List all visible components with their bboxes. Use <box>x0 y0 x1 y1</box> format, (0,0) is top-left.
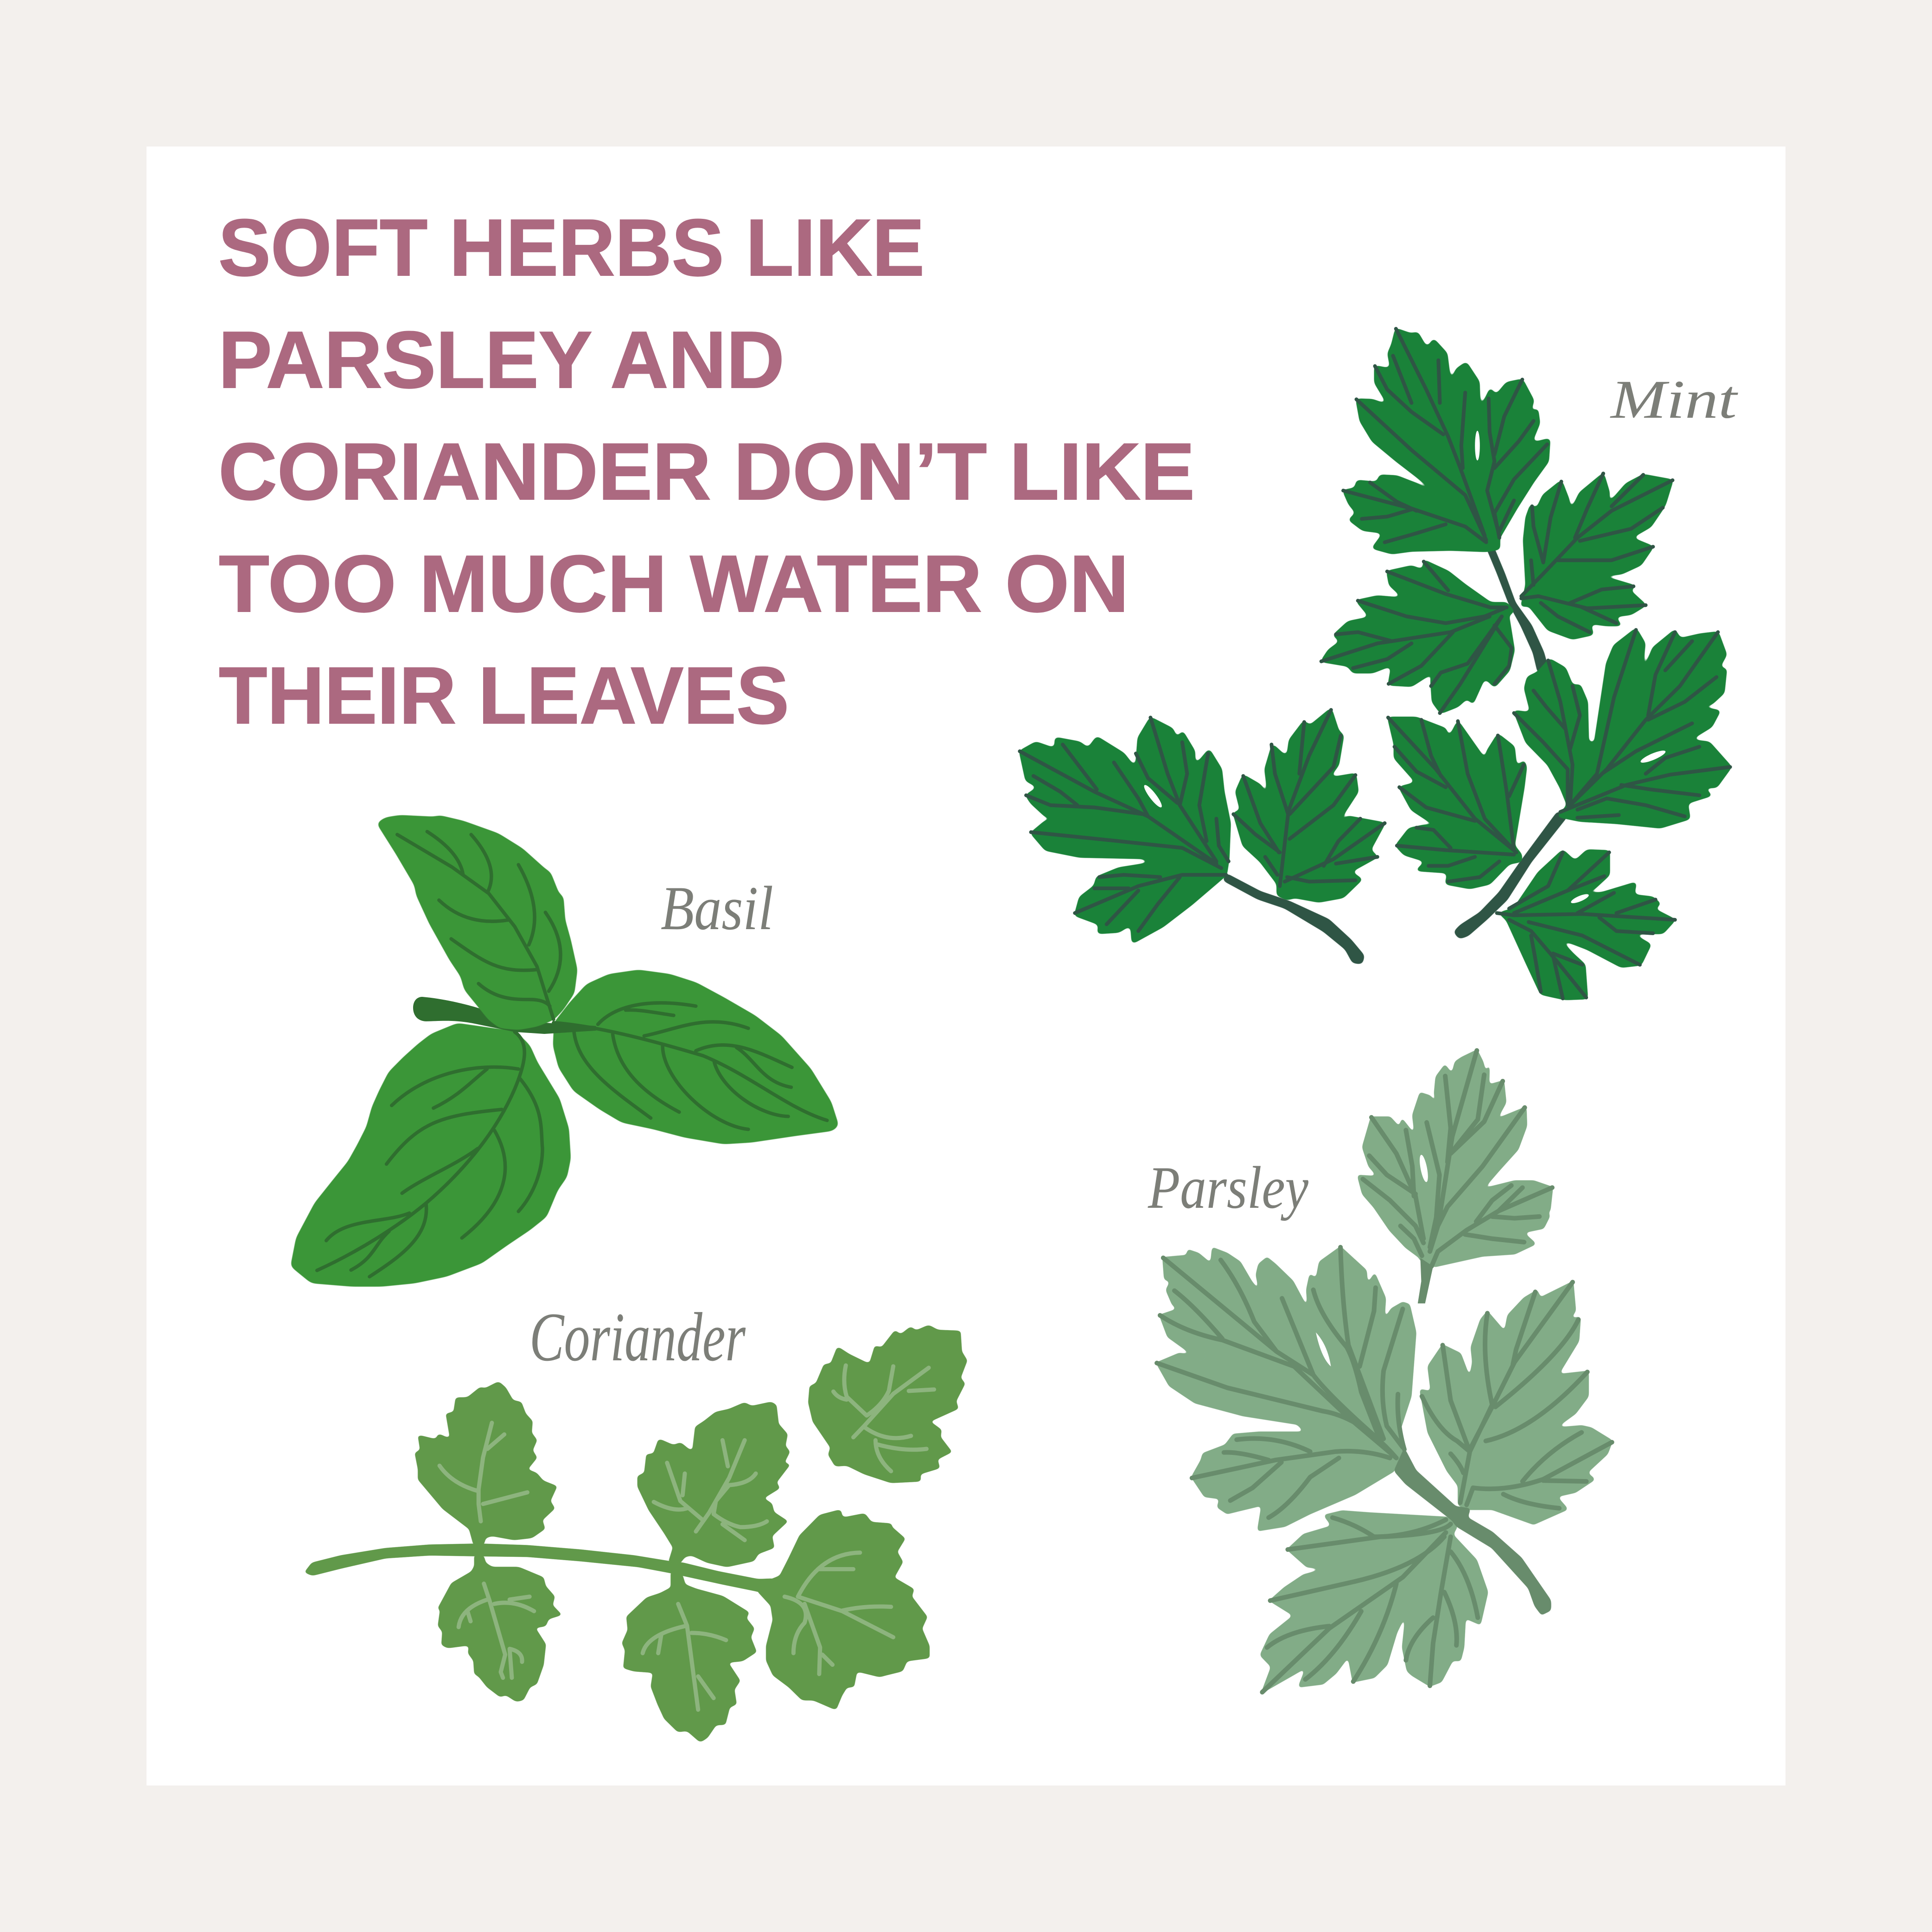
illustration: mint sprigs <box>1020 329 1731 999</box>
title: PARSLEY AND <box>218 314 784 405</box>
leaf: parsley upper right <box>1420 1282 1612 1524</box>
leaf: coriander middle upper <box>638 1403 789 1566</box>
leaf: mint bottom leaflet <box>1497 850 1675 999</box>
leaf: basil top <box>377 816 577 1029</box>
label: Coriander: Coriander <box>529 1299 746 1376</box>
leaf: parsley small top <box>1358 1051 1552 1303</box>
panel: white card <box>147 147 1785 1785</box>
illustration: parsley <box>1157 1051 1612 1692</box>
leaf: coriander lower left <box>439 1556 561 1701</box>
label: Mint: Mint <box>1610 369 1739 430</box>
title: THEIR LEAVES <box>219 650 789 740</box>
illustration: coriander <box>306 1326 966 1741</box>
leaf: coriander middle lower <box>623 1572 756 1741</box>
stem: mint left sprig <box>1224 874 1364 963</box>
leaf: coriander detached <box>809 1326 966 1482</box>
leaf: parsley large left <box>1157 1247 1416 1530</box>
leaf: mint lower-left leaflet <box>1321 560 1514 713</box>
label: Parsley: Parsley <box>1148 1154 1308 1221</box>
leaf: mint large right leaflet <box>1514 629 1731 828</box>
leaf: basil right <box>554 970 838 1143</box>
title <box>218 202 1195 740</box>
leaf: parsley bottom <box>1261 1511 1487 1692</box>
leaf: mint right leaflet <box>1521 473 1672 639</box>
leaf: mint top leaflet <box>1343 329 1549 554</box>
stem: parsley <box>1395 1449 1550 1614</box>
leaf: coriander right <box>758 1511 929 1709</box>
stem: basil <box>413 997 596 1034</box>
stem: coriander <box>306 1544 784 1594</box>
illustration: basil <box>291 816 838 1286</box>
title: SOFT HERBS LIKE <box>218 202 925 293</box>
leaf: mint left sprig small leaflet <box>1233 708 1385 902</box>
label: Basil: Basil <box>661 874 773 943</box>
leaf: basil bottom <box>291 1024 570 1286</box>
leaf: mint mid-left leaflet <box>1388 718 1526 888</box>
leaf: mint left sprig large leaflet <box>1020 718 1230 943</box>
title: CORIANDER DON’T LIKE <box>218 426 1195 516</box>
stem: mint upper sprig <box>1485 542 1548 673</box>
leaf: coriander upper left <box>415 1382 556 1544</box>
stem: mint lower sprig <box>1454 812 1567 938</box>
title: TOO MUCH WATER ON <box>219 538 1129 629</box>
